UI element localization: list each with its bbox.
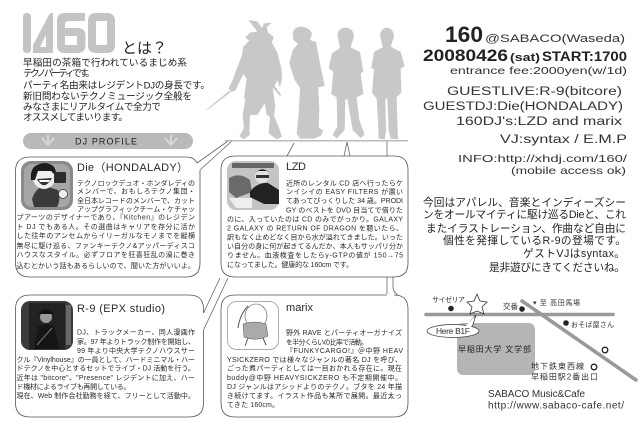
- panel: Die: 無尽に駆け巡る、ファンキーテクノ&アッパーディスコ: [16, 241, 195, 250]
- lineup: GUESTLIVE:R-9(bitcore): [447, 86, 622, 98]
- panel: marix: 『FUNKYCARGO!』＠中野 HEAV: [286, 346, 403, 355]
- intro text block: みなさまにリアルタイムで全力で: [23, 101, 161, 113]
- event date and start time: (sat): [510, 52, 540, 64]
- logo: 160: [23, 13, 115, 53]
- avatar: Die illustration: [21, 161, 73, 210]
- venue name and url: SABACO Music&Cafe: [488, 389, 585, 400]
- panel: LZD: のに、入っていたのは CD のみでがっかり。GALAXY: [227, 215, 403, 224]
- intro text block: 早稲田の茶箱で行われているまじめ系: [23, 57, 187, 69]
- connector lines: speech bubble tails: [197, 141, 399, 330]
- panel: R-9: [16, 295, 204, 417]
- panel: LZD: LZD: [286, 161, 306, 173]
- panel: Die: した往年のアンセムからイリーガルなモノまでを縦横: [16, 231, 195, 240]
- panel: marix: 野外 RAVE とパーティオーガナイズ: [286, 328, 402, 337]
- panel: R-9: クル『Vinylhouse』の一員として、ハードミニマル・ハー: [16, 356, 195, 364]
- panel: LZD: ンイシイの EASY FILTERS が置い: [286, 187, 403, 196]
- event title: 160: [445, 22, 483, 47]
- event info block: @SABACO(Waseda): [485, 33, 625, 45]
- panel: marix: DJ ジャンルはアシッドよりのテクノ。ブタを 24 年描: [227, 382, 402, 391]
- event info block: VJ:syntax / E.M.P: [500, 134, 627, 146]
- panel: LZD: 近所のレンタル CD 店へ行ったらケ: [286, 178, 403, 188]
- map: labels: 交番: [503, 301, 518, 311]
- panel: Die: プアーツのデザイナーであり、『Kitchen』のレジデン: [16, 213, 195, 222]
- panel: R-9: 近年は "bitcore"、"Presence" レジデントに加え、ハー: [16, 373, 195, 382]
- panel: LZD: りません。血液検査をしたらγ-GTPの値が 150→75: [227, 250, 403, 259]
- panel: marix: buddy@中野 HEAVYSICKZERO も不定期開催中。: [227, 373, 402, 382]
- panel: marix: [221, 295, 408, 417]
- entrance fee: entrance fee:2000yen(w/1d): [450, 66, 627, 77]
- map: labels: 地下鉄東西線: [531, 361, 584, 371]
- announcement paragraph: ンをオールマイティに駆け巡るDieと、これ: [423, 209, 626, 221]
- intro text block: パーティ名由来はレジデントDJの身長です。: [23, 80, 210, 92]
- silhouette: person 3: [329, 28, 365, 139]
- panel: R-9: 現在、Web 制作会社勤務を経て、フリーとして活動中。: [16, 391, 195, 400]
- map: labels: 早稲田駅2番出口: [531, 372, 598, 382]
- DJ PROFILE banner: [23, 133, 193, 149]
- announcement paragraph: 是非遊びにきてくださいね。: [489, 261, 625, 274]
- panel: Die: 込むとかいう話もあるらしいので、聞いた方がいいよ。: [16, 261, 195, 270]
- silhouette: person 2: [289, 27, 325, 139]
- panel: LZD: てあってびっくりした 34 歳。PRODI: [286, 196, 403, 205]
- panel: LZD: GY のベストを DVD 目当てで借りた: [286, 205, 403, 214]
- panel: LZD: 2 GALAXY の RETURN OF DRAGON を聴いたら、: [227, 224, 403, 233]
- icon: right arrow: [165, 135, 177, 145]
- map: star icon: [467, 294, 487, 314]
- panel: Die: [16, 157, 200, 277]
- panel: R-9: DJ、トラックメーカー、同人漫画作: [77, 328, 195, 337]
- panel: LZD: い自分の身に何が起きてるんだか、本人もサッパリ分か: [227, 242, 403, 251]
- announcement paragraph: 個性を発揮しているR-9の登場です。: [443, 234, 626, 247]
- panel: marix: YSICKZERO では様々なジャンルの著名 DJ を呼び、: [227, 355, 402, 364]
- event date and start time: [423, 47, 627, 65]
- map: labels: サイゼリア: [432, 295, 465, 304]
- panel: Die: ハウスなスタイル。必ずフロアを狂喜狂乱の渦に巻き: [16, 250, 195, 259]
- panel: LZD: 訳もなく止めどなく目から水が溢れてきました。いった: [227, 233, 403, 242]
- event info block: GUESTDJ:Die(HONDALADY): [423, 101, 623, 113]
- panel: R-9: 99 年より中央大学テクノハウスサー: [77, 346, 195, 355]
- map: here bubble: Here B1F: [436, 326, 470, 336]
- map: labels: ▾ 至 高田馬場: [533, 298, 580, 307]
- silhouette: person 4: [371, 28, 405, 139]
- panel: R-9: R-9 (EPX studio): [77, 303, 165, 315]
- event info block: (mobile access ok): [511, 165, 626, 177]
- panel: marix: てきた 160cm。: [227, 401, 279, 409]
- panel: marix: ごった煮パーティとしては一目おかれる存在に。現在: [227, 364, 402, 372]
- venue name and url: [488, 389, 624, 412]
- info url: INFO:http://xhdj.com/160/: [458, 153, 627, 165]
- panel: R-9: ドテクノを中心とするセットでライブ・DJ 活動を行う。: [16, 364, 195, 372]
- baseline under silhouettes: [225, 140, 408, 142]
- avatar: LZD photo: [227, 161, 279, 210]
- panel: Die: メンバーで、おもしろテクノ集団・: [77, 187, 195, 196]
- panel: R-9: ド機材によるライブも再開している。: [16, 382, 130, 391]
- announcement paragraph: 今回はアパレル、音楽とインディーズシー: [423, 196, 626, 209]
- silhouettes: four DJs: [207, 20, 405, 139]
- silhouette: samurai: [207, 20, 282, 139]
- DJ PROFILE banner: DJ PROFILE: [75, 136, 137, 146]
- map: labels: 早稲田大学 文学部: [458, 344, 531, 354]
- intro text block: [23, 57, 210, 124]
- map: here bubble: [427, 315, 479, 338]
- avatar: R-9 photo: [21, 301, 73, 350]
- event info block: [423, 22, 627, 177]
- map: roads: [426, 301, 636, 380]
- announcement paragraph: ゲストVJはsyntax。: [523, 248, 625, 260]
- map: university block: [457, 323, 535, 375]
- panel: marix: marix: [286, 302, 314, 314]
- announcement paragraph: またイラストレーション、作曲など自由に: [426, 222, 626, 235]
- venue name and url: http://www.sabaco-cafe.net/: [488, 400, 624, 412]
- heading: とは？: とは？: [122, 40, 167, 57]
- panel: marix: を半分くらいの比率で活動。: [286, 338, 368, 347]
- panel: Die: Die（HONDALADY）: [77, 161, 188, 174]
- announcement paragraph: [423, 196, 626, 274]
- avatar: marix illustration: [228, 302, 278, 350]
- map: [426, 294, 636, 412]
- panel: Die: ト DJ でもある人。その選曲はキャリアを存分に活か: [16, 222, 195, 231]
- panel: Die: アップグラフィックチーム・ケチャッ: [77, 204, 195, 213]
- event date and start time: START:1700: [542, 49, 627, 64]
- map: landmark dots: [448, 306, 569, 326]
- event date and start time: 20080426: [423, 47, 508, 65]
- intro text block: オススメしてまいります。: [23, 112, 128, 124]
- intro text block: 新旧問わないテクノミュージック全般を: [23, 90, 192, 102]
- panel: Die: 全日本レコードのメンバーで、カット: [77, 196, 195, 205]
- panel: Die: テクノロックデュオ・ホンダレディの: [77, 178, 195, 187]
- panel: R-9: 家。97 年よりトラック制作を開始し、: [77, 337, 195, 346]
- intro text block: テクノパーティです。: [23, 68, 95, 80]
- map: subway exit markers: [591, 347, 608, 370]
- icon: left arrow: [42, 135, 54, 145]
- map: labels: [432, 295, 614, 382]
- panel: LZD: [221, 156, 408, 277]
- map: labels: おそば屋さん: [571, 320, 614, 329]
- panel: LZD: になってました。健康的な 160cm です。: [227, 260, 353, 269]
- event info block: 160DJ's:LZD and marix: [456, 116, 622, 128]
- panel: marix: き続けてます。イラスト作品も某所で展開。最近太っ: [227, 391, 402, 400]
